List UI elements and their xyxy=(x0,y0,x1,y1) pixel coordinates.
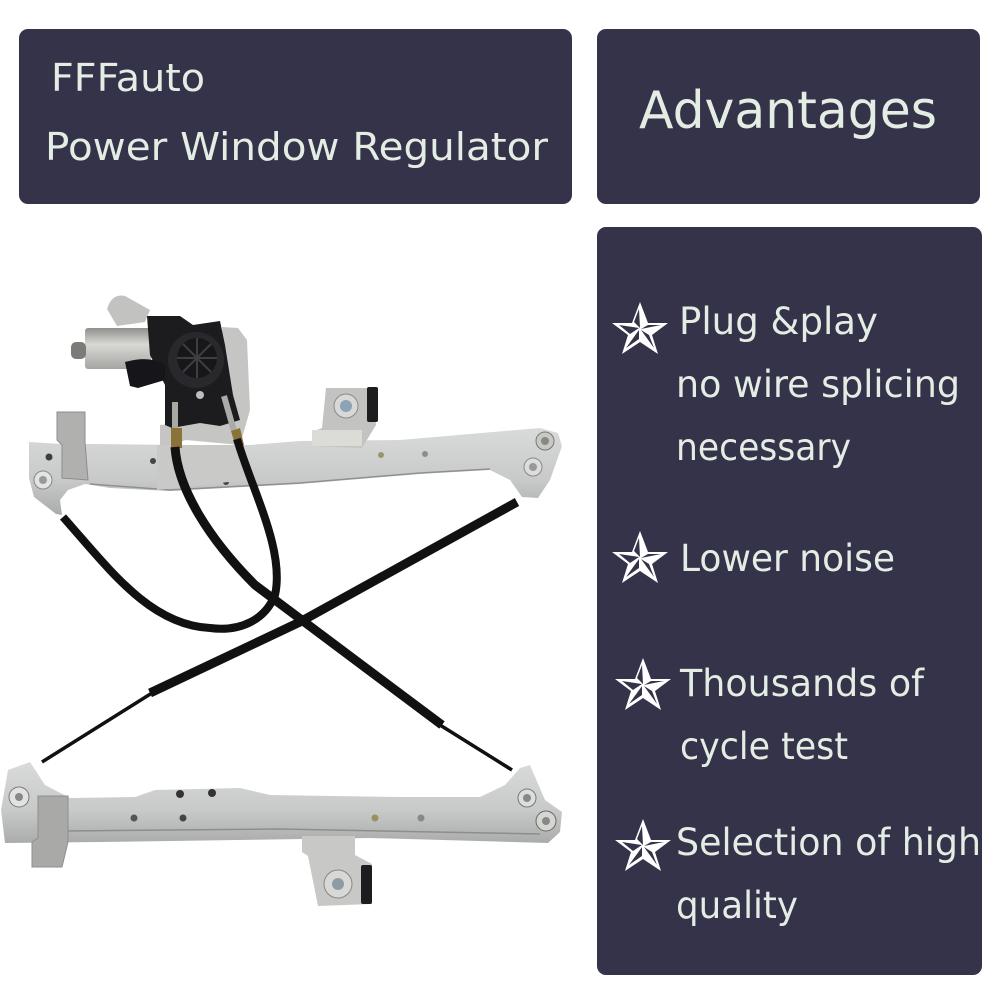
lower left bracket xyxy=(32,796,68,867)
heading: advantages: Advantages xyxy=(639,81,937,141)
panel: product title xyxy=(19,29,572,204)
motor ear xyxy=(107,296,150,326)
advantage: high quality xyxy=(615,819,981,927)
advantage: cycle test: cycle test xyxy=(680,725,848,768)
advantage: plug and play: Plug &play xyxy=(679,300,878,343)
advantage: cycle test: Thousands of xyxy=(679,662,925,705)
advantage: high quality: quality xyxy=(676,884,798,927)
product photo: power window regulator xyxy=(1,296,562,906)
advantage: cycle test xyxy=(615,658,925,768)
upper slider clip xyxy=(312,387,378,448)
advantage: plug and play xyxy=(612,300,960,469)
advantage: plug and play: necessary xyxy=(676,426,851,469)
advantage: lower noise: Lower noise xyxy=(680,537,895,580)
mounting plate xyxy=(160,327,250,448)
gearbox xyxy=(125,316,244,448)
advantage: lower noise xyxy=(612,531,895,583)
motor can xyxy=(71,328,151,369)
panel: advantages list xyxy=(597,227,982,975)
lower rail xyxy=(1,762,562,843)
title: brand: FFFauto xyxy=(51,56,205,100)
advantage: plug and play: no wire splicing xyxy=(676,363,960,406)
upper rail xyxy=(29,428,562,515)
advantage: high quality: Selection of high xyxy=(676,821,981,864)
cable conduits xyxy=(42,439,517,770)
upper left bracket xyxy=(57,412,88,480)
title: product name: Power Window Regulator xyxy=(45,125,548,169)
panel: advantages heading xyxy=(597,29,980,204)
lower slider clip xyxy=(302,836,372,906)
